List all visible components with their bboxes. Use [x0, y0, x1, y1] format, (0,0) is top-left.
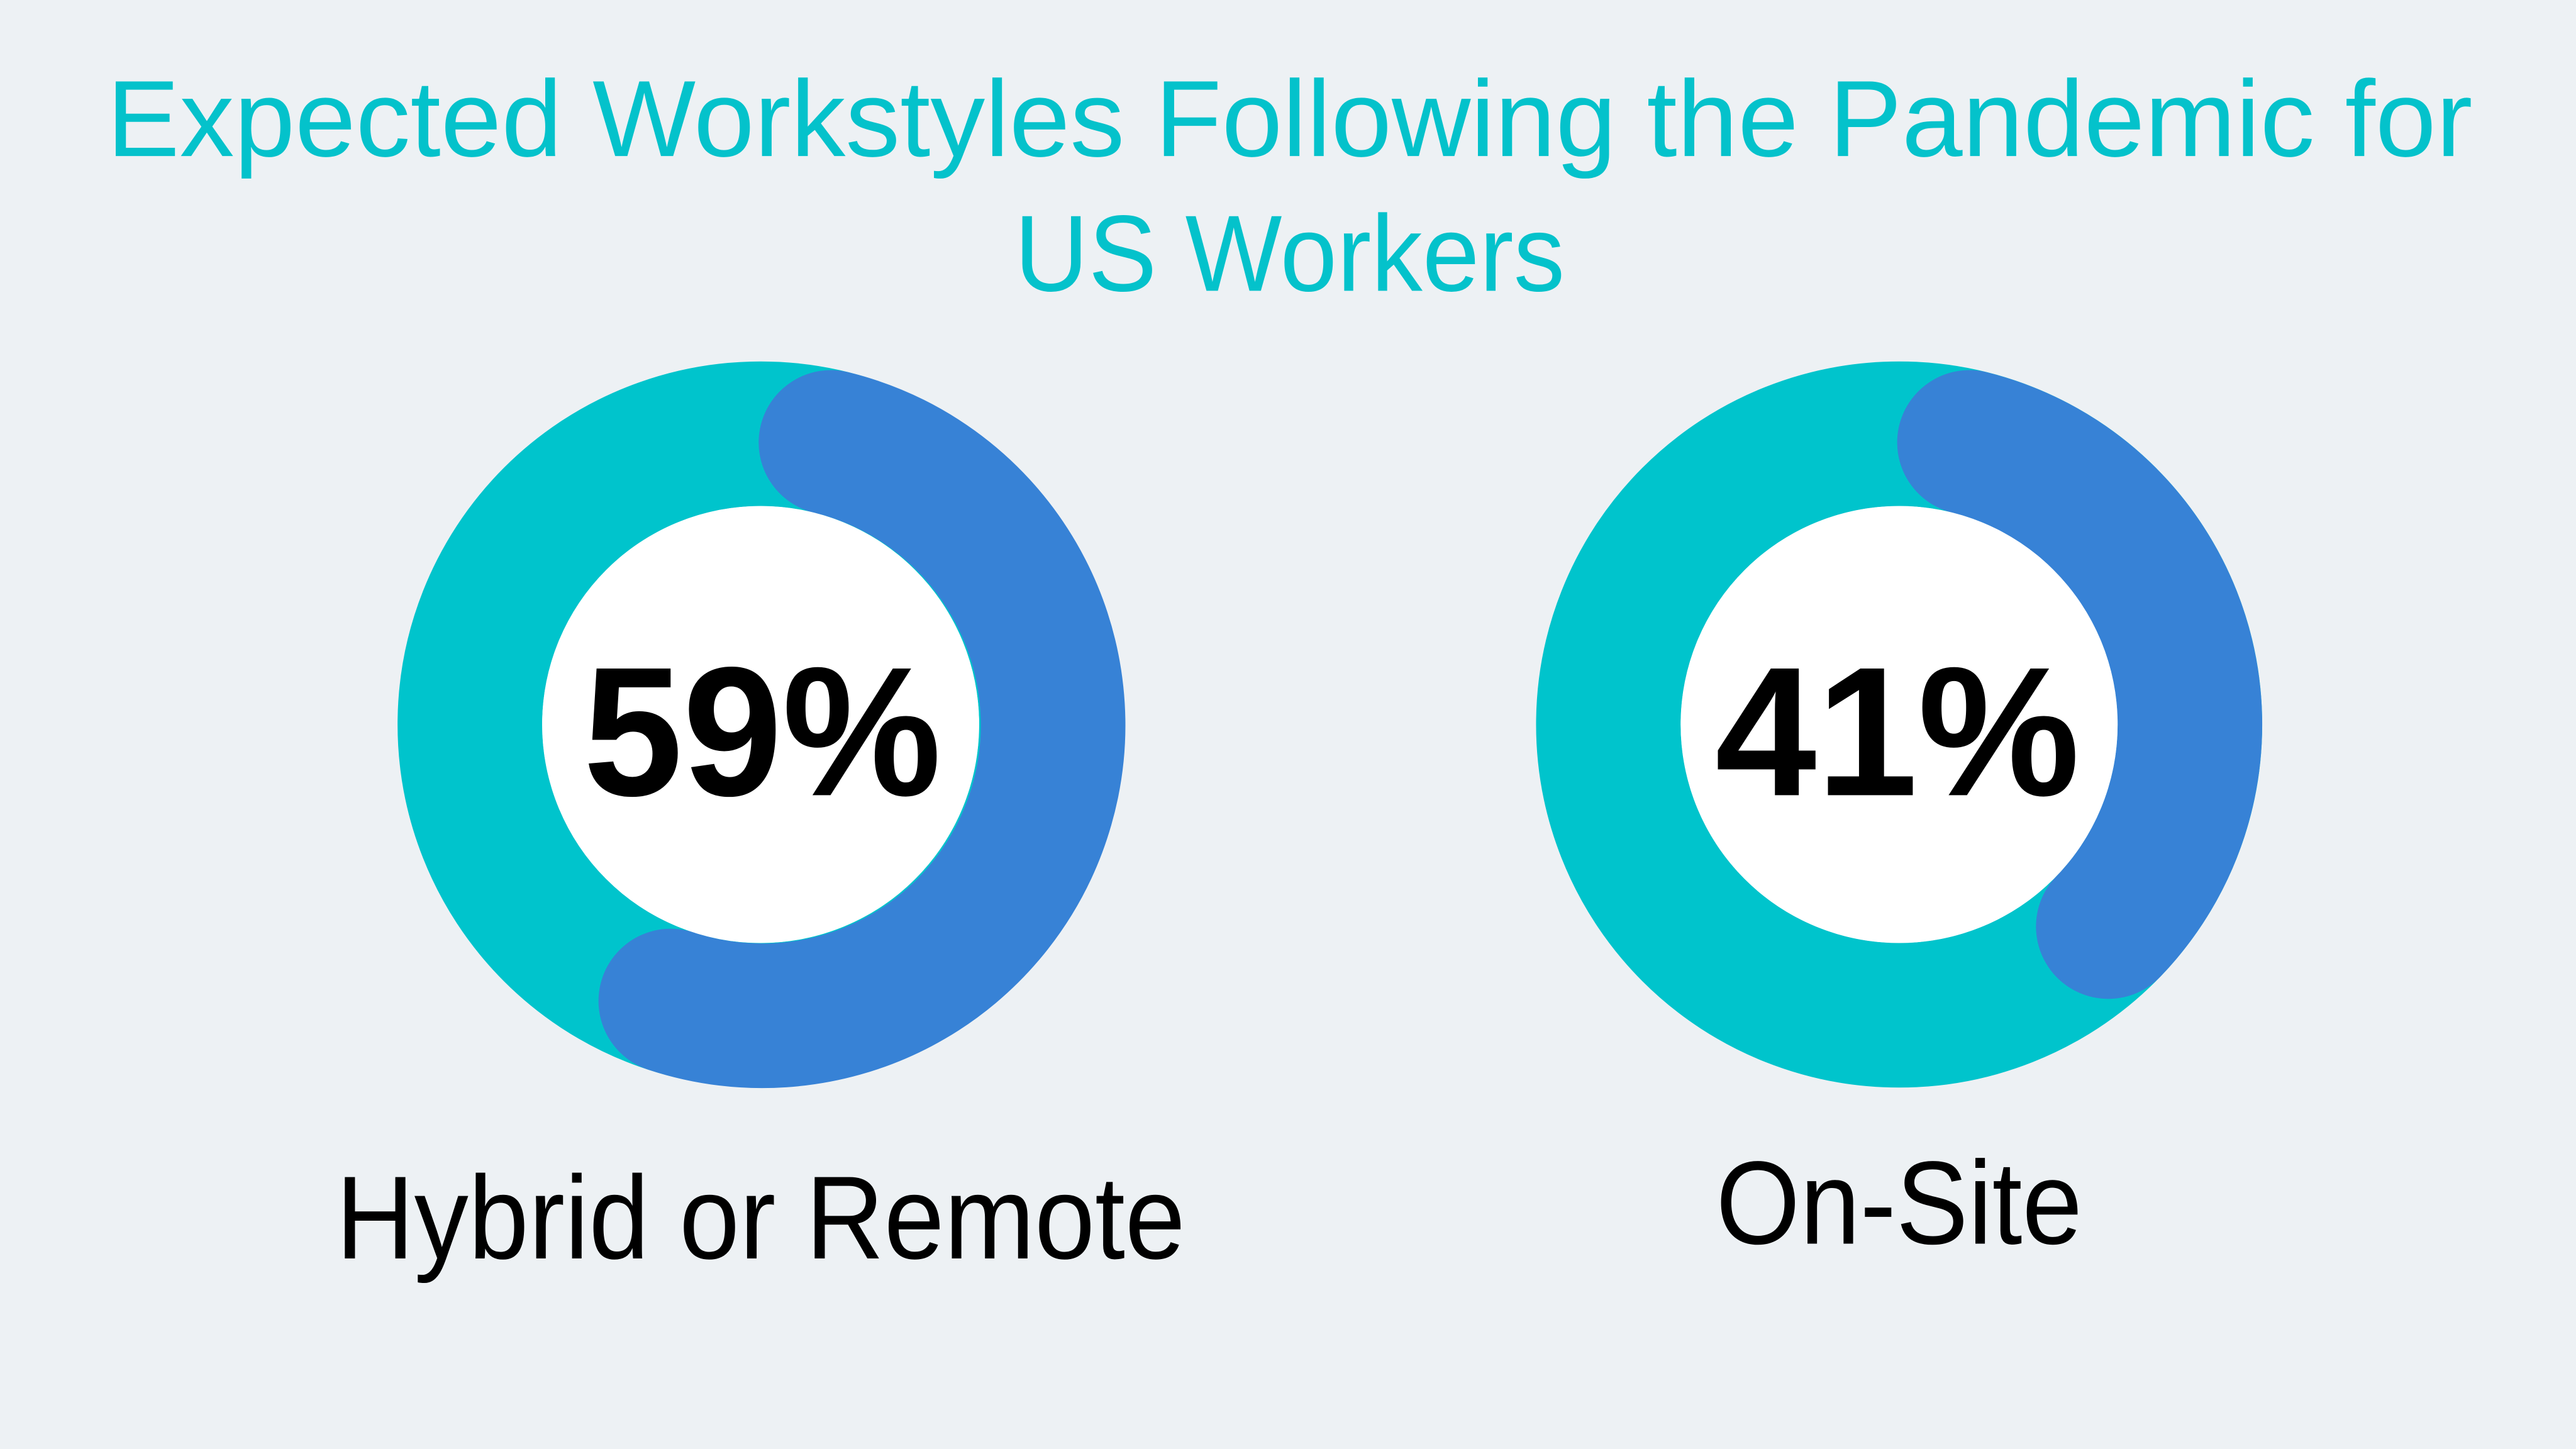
donut chart: on-site 41% — [1608, 434, 2190, 1015]
percentage: 41%: 41% — [1715, 628, 2080, 834]
donut chart: hybrid or remote 59% — [470, 434, 1053, 1016]
percentage: 59%: 59% — [583, 628, 941, 834]
title — [107, 58, 2472, 314]
label: on-site: On-Site — [1716, 1136, 2082, 1269]
title: US Workers — [1014, 192, 1565, 314]
title: Expected Workstyles Following the Pandemic for — [107, 58, 2472, 179]
label: hybrid or remote: Hybrid or Remote — [336, 1152, 1185, 1284]
